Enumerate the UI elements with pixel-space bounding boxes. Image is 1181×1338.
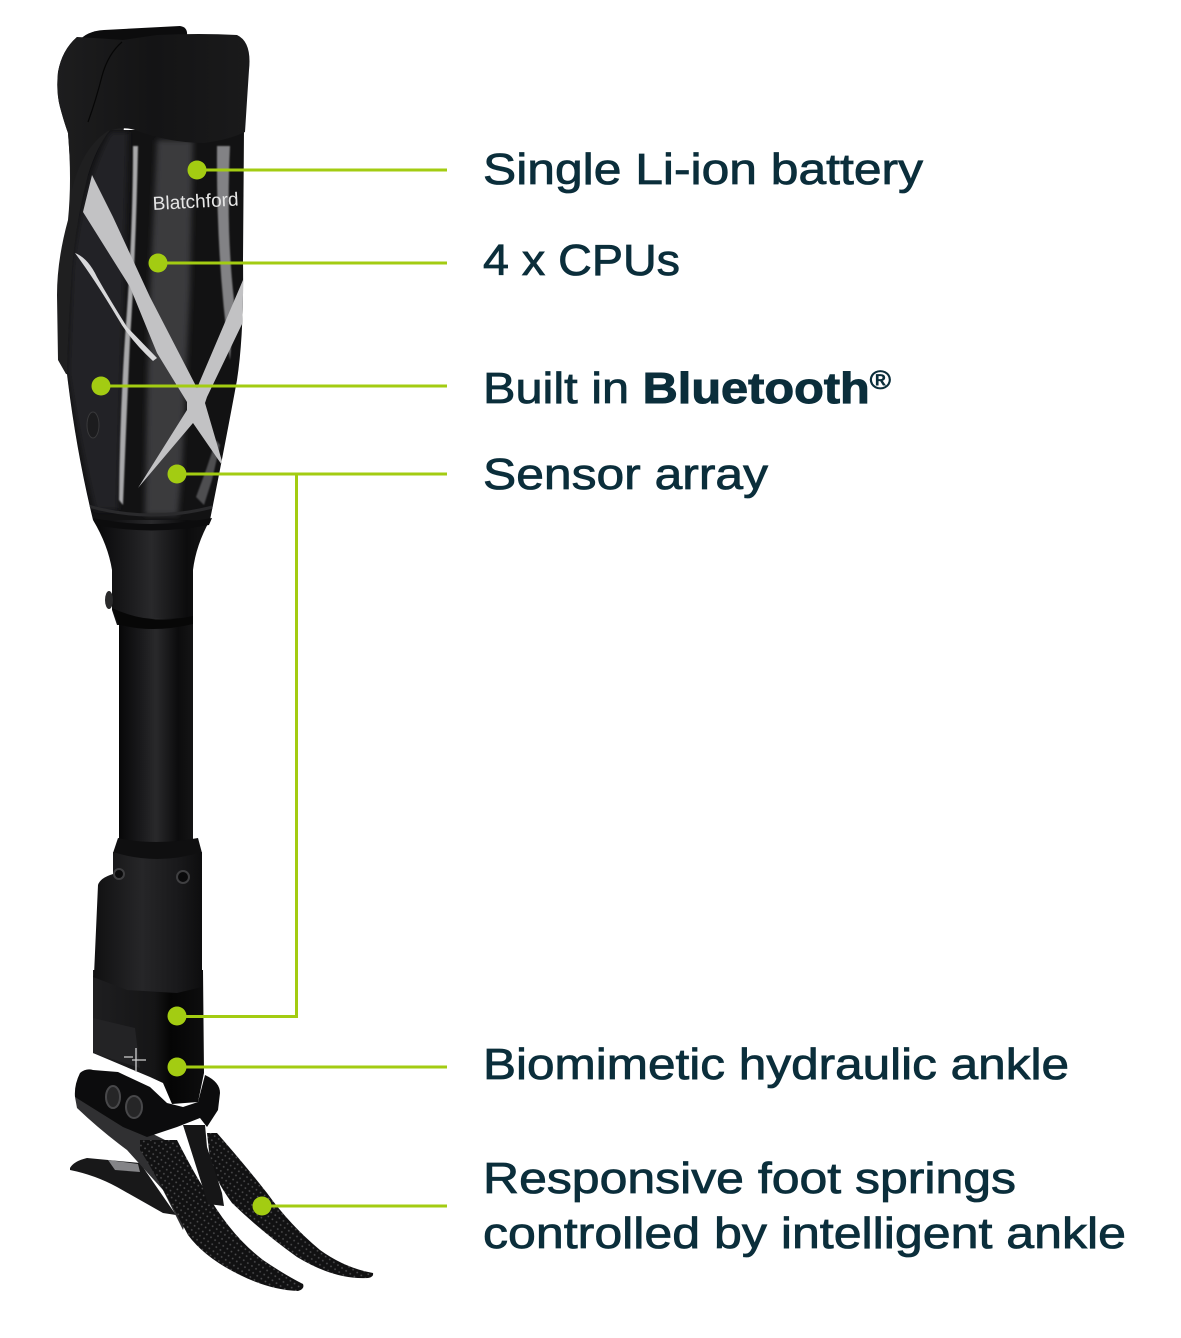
label: Bluetooth: Built in Bluetooth (483, 364, 848, 413)
label: foot springs: Responsive foot springs (483, 1154, 1016, 1203)
mottled carbon side (68, 132, 128, 510)
ankle bolts (114, 869, 189, 883)
top adapter (78, 26, 187, 50)
centre blade (183, 1125, 224, 1206)
silver X graphic (83, 175, 243, 488)
label: foot springs (483, 1154, 1126, 1258)
label: CPUs: 4 x CPUs (483, 236, 680, 285)
label: battery: Single Li-ion battery (483, 145, 923, 194)
socket glossy body (60, 125, 250, 525)
ankle bolts lower (106, 1086, 142, 1118)
foot spring inner (140, 1140, 303, 1291)
reflection streaks (119, 146, 138, 505)
callout lines (101, 170, 447, 1206)
hydraulic band (93, 1018, 140, 1068)
side button (87, 412, 99, 438)
callout dots (92, 160, 272, 1216)
label: sensor array: Sensor array (483, 450, 768, 499)
carbon keel (75, 1097, 195, 1230)
ankle housing (93, 852, 202, 993)
pylon neck (93, 520, 210, 625)
socket rubber cap (57, 34, 250, 190)
alignment marks (124, 1048, 146, 1072)
silver swoosh (75, 253, 157, 361)
label: foot springs: controlled by intelligent ankle (483, 1209, 1126, 1258)
pylon shaft (119, 618, 193, 853)
brand label: Blatchford (152, 190, 239, 215)
socket rear shell (57, 37, 125, 380)
label: Bluetooth: ® (870, 365, 891, 395)
foot spring outer (207, 1133, 373, 1278)
base rim (85, 505, 220, 515)
prosthetic leg illustration (57, 26, 373, 1291)
label: hydraulic ankle: Biomimetic hydraulic ankle (483, 1040, 1069, 1089)
ankle pivot block (75, 1069, 220, 1137)
hydraulic unit (93, 970, 204, 1104)
ankle collar (113, 838, 202, 860)
heel spring (70, 1158, 176, 1215)
grey centre band (145, 140, 193, 515)
